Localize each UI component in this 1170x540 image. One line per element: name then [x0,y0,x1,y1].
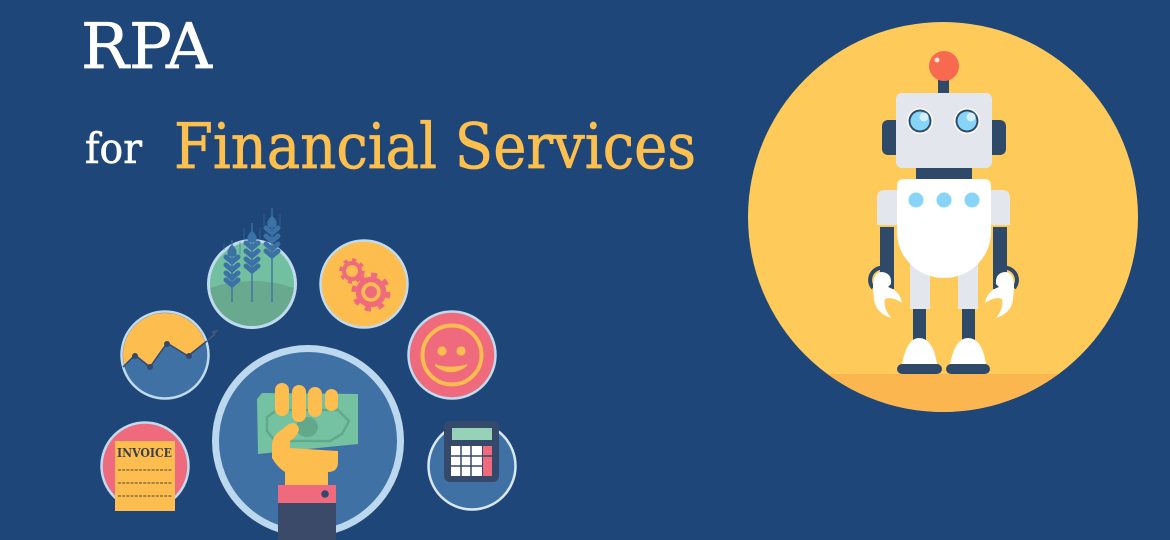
eyes [907,108,980,134]
robot [870,51,1017,374]
icon: invoice circle: INVOICE [117,446,172,460]
head [896,93,992,168]
legs [910,262,978,341]
icon: hand holding money [216,348,400,540]
chest lights [908,192,980,208]
shirt cuff [278,485,336,503]
ears [882,120,1006,155]
neck [916,166,972,180]
antenna [929,51,959,94]
icon: smiley circle [408,312,496,398]
fingers [275,383,338,422]
sleeve [278,503,336,540]
feet [897,338,990,374]
icon: line chart circle [115,310,218,398]
icon: gears circle [320,240,408,328]
hand palm and thumb [272,423,338,486]
arms [877,190,1010,289]
icon: invoice circle [102,422,188,511]
title: RPA: RPA [81,10,214,83]
icon: calculator circle [428,421,516,510]
title: for: for [85,124,143,173]
robot circle [740,22,1150,424]
torso [897,179,991,278]
hands [870,268,1017,318]
money bills [257,393,358,454]
icon: wheat field circle [208,208,296,330]
title: Financial Services: Financial Services [174,110,696,183]
